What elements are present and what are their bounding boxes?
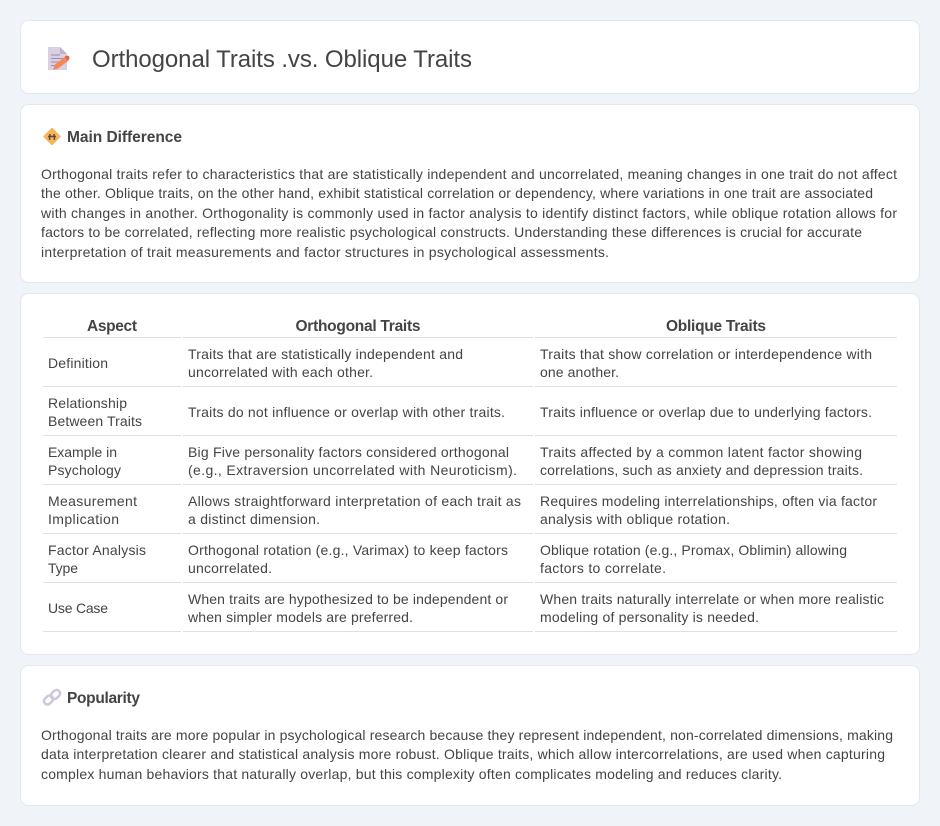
table row: definition: Traits that are statistically independent and (188, 346, 463, 362)
table row: factor analysis type: uncorrelated. (188, 560, 272, 576)
table row: factor analysis type: factors to correlate. (540, 560, 666, 576)
text block: main difference paragraph: interpretation of trait measurements and factor structures in psychological assessments. (41, 244, 609, 260)
table row: measurement: Requires modeling interrelationships, often via factor (540, 493, 877, 509)
table row: use case: modeling of personality is needed. (540, 609, 759, 625)
table row: use case: when simpler models are preferred. (187, 609, 413, 625)
table row: use case: When traits are hypothesized to be independent or (188, 591, 508, 607)
table row: measurement: Implication (48, 511, 119, 527)
table row: factor analysis type: Type (48, 560, 78, 576)
table row: use case (48, 591, 884, 625)
title: Orthogonal Traits .vs. Oblique Traits (92, 46, 472, 73)
table row: factor analysis type: Orthogonal rotation (e.g., Varimax) to keep factors (188, 542, 508, 558)
table row: relationship: Traits influence or overlap due to underlying factors. (540, 404, 872, 420)
text block: main difference paragraph: with changes in another. Orthogonality is commonly used in factor analysis to identify distinct factors, while oblique rotation allows for (40, 205, 897, 221)
table header: Oblique Traits (666, 318, 766, 335)
table row: use case: When traits naturally interrelate or when more realistic (540, 591, 884, 607)
table row: definition: Definition (48, 355, 108, 371)
table row: relationship (48, 395, 872, 429)
table header: Aspect (87, 318, 137, 335)
table row: example: Traits affected by a common latent factor showing (540, 444, 862, 460)
table row: example: Psychology (48, 462, 121, 478)
text block: popularity paragraph: complex human behaviors that naturally overlap, but this complexity often complicates modeling and reduces clarity. (41, 766, 782, 782)
table row: definition (48, 346, 872, 380)
panel: main difference (20, 104, 920, 282)
table row: definition: one another. (540, 364, 619, 380)
icon: diamond sign (44, 128, 60, 144)
panel: title card (20, 20, 920, 94)
text block: main difference paragraph: Orthogonal traits refer to characteristics that are statistically independent and uncorrelated, meaning changes in one trait do not affect (41, 166, 897, 182)
table row: example: Example in (48, 444, 117, 460)
table row: example (48, 444, 863, 478)
table row: relationship: Relationship (48, 395, 127, 411)
text block: main difference paragraph: factors to be correlated, reflecting more realistic psychological constructs. Understanding these differences is crucial for accurate (41, 224, 862, 240)
panel: comparison table (20, 294, 920, 654)
icon: document with pencil (48, 47, 70, 70)
text block: popularity paragraph: data interpretation clearer and statistical analysis more robust. Oblique traits, which allow intercorrelations, are used when capturing (41, 746, 885, 762)
text block: main difference paragraph: the other. Oblique traits, on the other hand, exhibit statistical correlation or dependency, where variations in one trait are associated (41, 185, 873, 201)
text block: popularity paragraph (41, 727, 893, 782)
table row: factor analysis type (48, 542, 847, 576)
table row: measurement: analysis with oblique rotation. (540, 511, 730, 527)
table row: relationship: Between Traits (48, 413, 142, 429)
text block: popularity paragraph: Orthogonal traits are more popular in psychological research because they represent independent, non-correlated dimensions, making (41, 727, 893, 743)
text block: main difference paragraph (40, 166, 897, 260)
table header: Orthogonal Traits (296, 318, 420, 335)
table row: measurement: Allows straightforward interpretation of each trait as (188, 493, 521, 509)
table row: relationship: Traits do not influence or overlap with other traits. (188, 404, 505, 420)
table row: definition: Traits that show correlation or interdependence with (540, 346, 872, 362)
table row: use case: Use Case (48, 600, 108, 616)
table row: factor analysis type: Oblique rotation (e.g., Promax, Oblimin) allowing (540, 542, 847, 558)
icon: chain link (42, 688, 62, 706)
table row: definition: uncorrelated with each other. (188, 364, 373, 380)
table row: measurement (48, 493, 877, 527)
table row: factor analysis type: Factor Analysis (48, 542, 146, 558)
table header (87, 318, 766, 335)
table row: example: correlations, such as anxiety and depression traits. (540, 462, 863, 478)
table row: measurement: a distinct dimension. (188, 511, 320, 527)
table row: example: (e.g., Extraversion uncorrelated with Neuroticism). (188, 462, 517, 478)
panel: popularity (20, 666, 920, 806)
table row: example: Big Five personality factors considered orthogonal (188, 444, 509, 460)
heading: popularity: Popularity (67, 690, 140, 707)
heading: main difference: Main Difference (67, 129, 182, 146)
table row: measurement: Measurement (48, 493, 137, 509)
